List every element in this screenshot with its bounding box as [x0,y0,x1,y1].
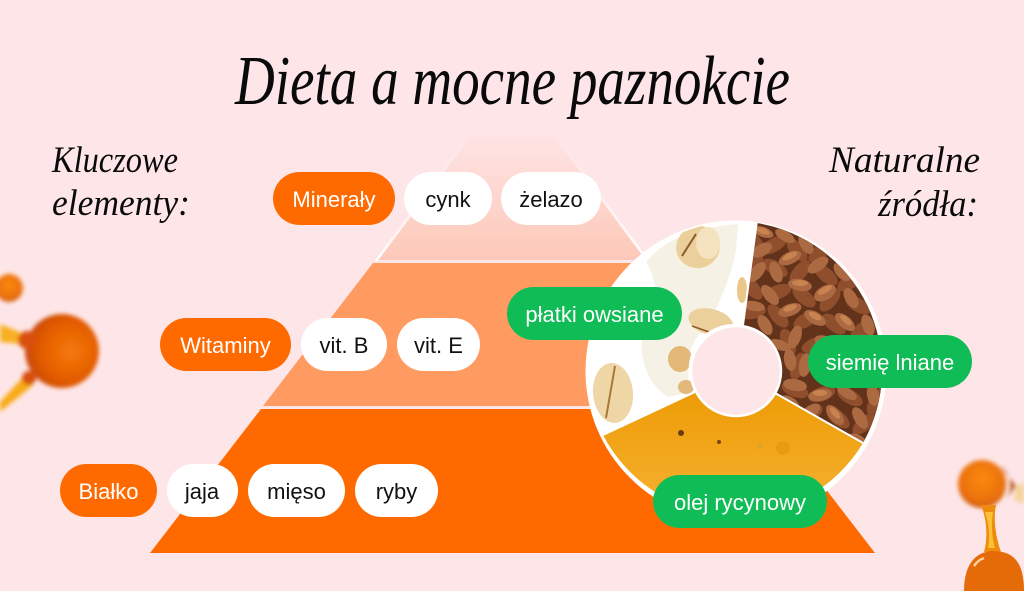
pyramid tier: bottom [150,409,875,553]
pill: jaja: jaja [184,479,220,504]
pill: vit. B [301,318,387,371]
donut chart of natural sources [586,220,886,497]
pill: Minerały [273,172,395,225]
pill: ryby: ryby [376,479,417,504]
pill: vit. E: vit. E [414,333,463,358]
label: siemię lniane: siemię lniane [826,350,954,375]
heading: Naturalne zrodla [828,140,980,225]
pill: vit. B: vit. B [320,333,368,358]
pyramid tier: middle [263,263,762,406]
pill: Białko: Białko [79,479,138,504]
pill: Witaminy [160,318,291,371]
pyramid tier: top [376,132,647,260]
pill: vit. E [397,318,480,371]
pyramid [150,132,875,553]
pill: cynk [404,172,492,225]
pill group: Białko [60,464,438,517]
label: olej rycynowy [653,475,827,528]
title: Dieta a mocne paznokcie [234,43,790,120]
segment: castor oil [603,392,863,515]
pill group: Minerały [273,172,601,225]
pill: Minerały: Minerały [292,187,376,212]
segment: oats [592,224,747,423]
pill: jaja [167,464,238,517]
pill: żelazo: żelazo [519,187,583,212]
heading: Naturalne zrodla: Naturalne [828,140,980,181]
pill: cynk: cynk [425,187,472,212]
heading: Kluczowe elementy: elementy: [52,183,190,224]
heading: Kluczowe elementy [51,140,190,224]
pill: mięso [248,464,345,517]
icon: blurred molecule left [0,274,99,412]
label: płatki owsiane: płatki owsiane [525,302,664,327]
icon: molecule bottom right [958,460,1024,591]
pill: Witaminy: Witaminy [180,333,271,358]
heading: Naturalne zrodla: źródła: [877,184,978,225]
pill: Białko [60,464,157,517]
segment: flax seeds [743,223,881,443]
donut hole [691,326,781,416]
pill: ryby [355,464,438,517]
pill: mięso: mięso [267,479,326,504]
pill group: Witaminy [160,318,480,371]
label: siemię lniane [808,335,972,388]
heading: Kluczowe elementy: Kluczowe [51,140,178,181]
pill: żelazo [501,172,601,225]
label: olej rycynowy: olej rycynowy [674,490,806,515]
label: płatki owsiane [507,287,682,340]
